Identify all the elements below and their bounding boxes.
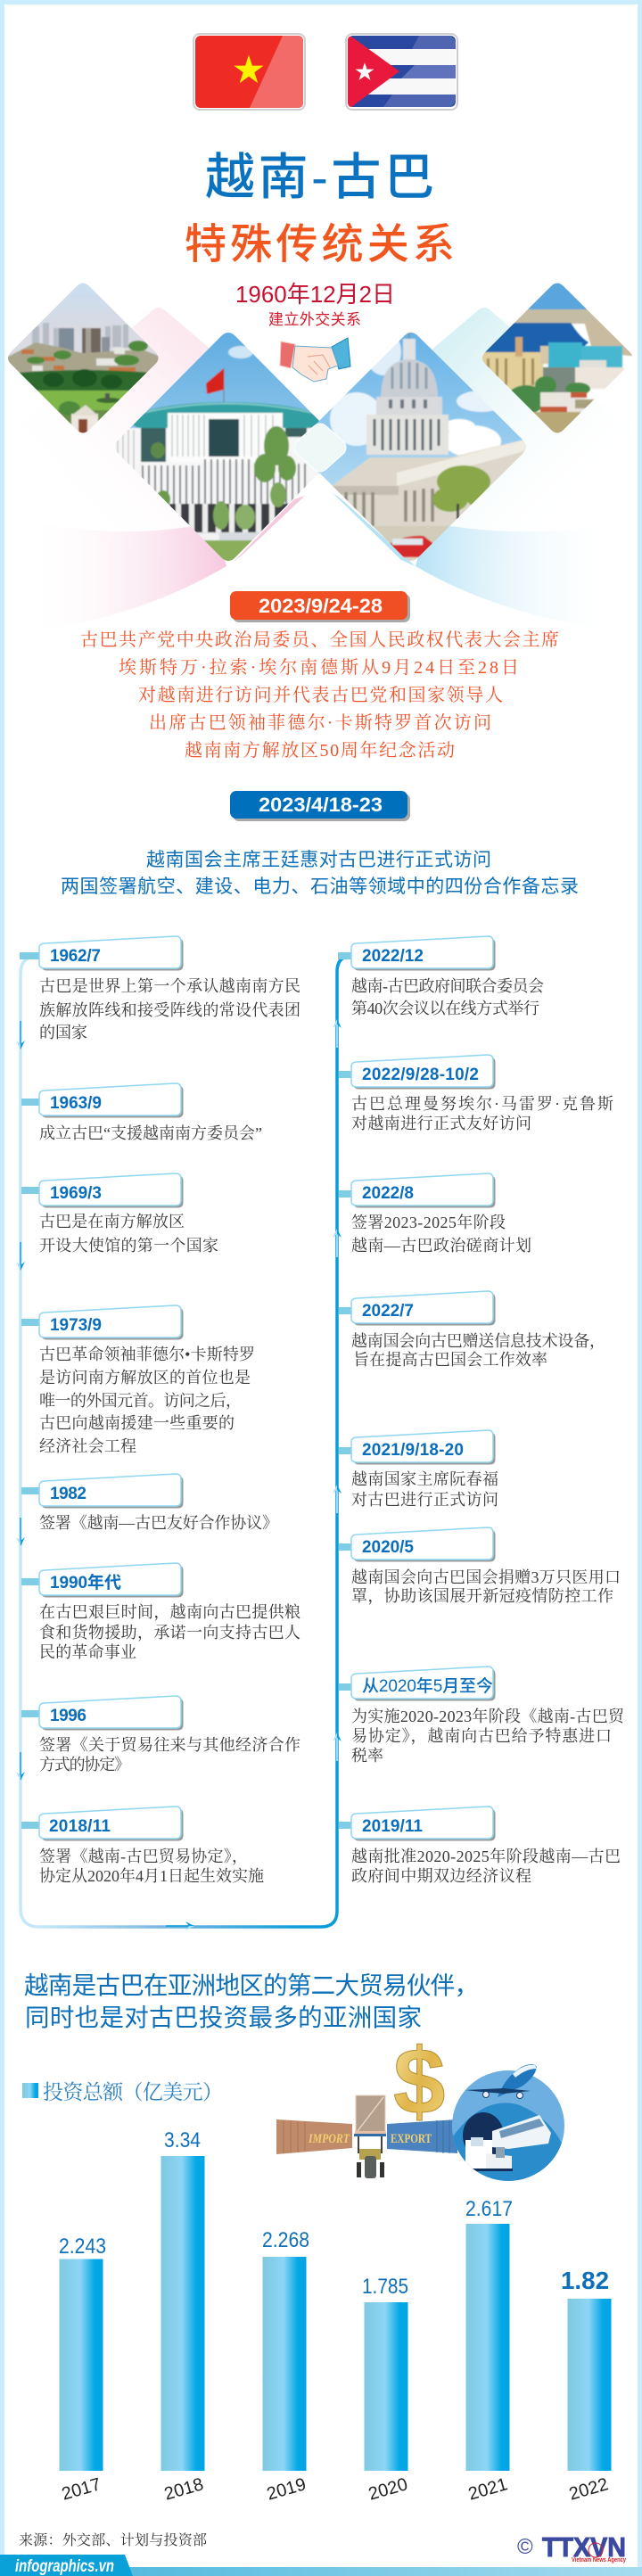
bar 2018: 2018 bbox=[162, 2474, 206, 2505]
text block: September 2023 visit: 埃斯特万·拉索·埃尔南德斯从9月24日至28日 bbox=[119, 657, 519, 678]
bar 2019 bbox=[262, 2228, 309, 2505]
timeline item: 1973/9: 是访问南方解放区的首位也是 bbox=[39, 1368, 251, 1387]
illustration: trade and logistics bbox=[276, 2044, 564, 2181]
timeline item: 2022/7: 越南国会向古巴赠送信息技术设备， bbox=[351, 1331, 605, 1350]
timeline item: 1969/3: 1969/3 bbox=[50, 1184, 102, 1203]
photo: Vietnam National Assembly building bbox=[116, 333, 319, 561]
text block: September 2023 visit: 对越南进行访问并代表古巴党和国家领导人 bbox=[138, 685, 503, 705]
timeline item: 1973/9: 经济社会工程 bbox=[39, 1437, 136, 1455]
bar 2017: 2017 bbox=[60, 2474, 103, 2505]
icon: handshake bbox=[280, 338, 350, 382]
timeline item: 2020/5: 越南国会向古巴国会捐赠3万只医用口 bbox=[351, 1568, 621, 1586]
bar 2019: 2.268 bbox=[262, 2228, 309, 2252]
bar 2020: 1.785 bbox=[362, 2275, 408, 2299]
timeline item: 2018/11: 2018/11 bbox=[49, 1817, 111, 1836]
timeline item: 2022/7: 2022/7 bbox=[362, 1302, 414, 1321]
bar 2022: 2022 bbox=[567, 2474, 611, 2505]
timeline item: 2022/12: 2022/12 bbox=[362, 947, 424, 966]
timeline item: 1963/9: 1963/9 bbox=[50, 1094, 102, 1113]
timeline item: 2022/8: 签署2023-2025年阶段 bbox=[351, 1213, 506, 1231]
bar chart: investment by year bbox=[59, 2128, 612, 2505]
title line 1: 越南-古巴 bbox=[205, 149, 434, 205]
chart legend: 投资总额（亿美元） bbox=[43, 2081, 223, 2103]
timeline item: 1963/9 bbox=[21, 1083, 262, 1142]
title line 2: 特殊传统关系 bbox=[185, 220, 455, 267]
badge: 2023/4/18-23: 2023/4/18-23 bbox=[259, 794, 383, 816]
timeline item: 2021/9/18-20: 越南国家主席阮春福 bbox=[351, 1469, 498, 1488]
timeline item: 1996: 方式的协定》 bbox=[39, 1756, 130, 1774]
timeline item: 2022/7: 旨在提高古巴国会工作效率 bbox=[353, 1351, 547, 1369]
timeline item: 1969/3 bbox=[21, 1173, 218, 1255]
arrows: down along left line bbox=[16, 1021, 25, 1781]
title bbox=[185, 149, 455, 267]
text block: September 2023 visit bbox=[80, 630, 559, 761]
source note: 来源：外交部、计划与投资部 bbox=[19, 2532, 207, 2548]
icon: export container bbox=[387, 2119, 457, 2153]
timeline item: 2022/9/28-10/2: 2022/9/28-10/2 bbox=[362, 1066, 479, 1084]
icon: gold dollar: $ bbox=[393, 2029, 445, 2134]
bar 2020 bbox=[362, 2275, 410, 2505]
bar 2020: 2020 bbox=[366, 2474, 410, 2505]
timeline item: since May 2020: 为实施2020-2023年阶段《越南-古巴贸 bbox=[351, 1707, 625, 1725]
timeline item: 1996: 签署《关于贸易往来与其他经济合作 bbox=[39, 1736, 300, 1754]
bar 2022: 1.82 bbox=[561, 2267, 609, 2294]
footer band bbox=[0, 2555, 642, 2576]
bar 2022 bbox=[561, 2267, 612, 2505]
timeline item: since May 2020: 税率 bbox=[351, 1747, 383, 1765]
background decoration: pink and cyan shapes bbox=[0, 308, 642, 630]
photo: Cuba Capitol building bbox=[316, 333, 526, 561]
timeline connector lines bbox=[21, 956, 352, 1927]
section heading: trade partner bbox=[24, 1971, 479, 2031]
timeline item: 2019/11: 2019/11 bbox=[362, 1817, 423, 1836]
timeline item: 1962/7: 古巴是世界上第一个承认越南南方民 bbox=[39, 976, 300, 995]
timeline item: 2022/12: 越南-古巴政府间联合委员会 bbox=[351, 976, 544, 995]
timeline item: 2022/12 bbox=[338, 936, 544, 1017]
timeline item: 2019/11 bbox=[339, 1806, 621, 1885]
bar 2021 bbox=[465, 2197, 513, 2505]
timeline item: 1962/7: 的国家 bbox=[39, 1024, 87, 1041]
arrow: along bottom line bbox=[166, 1922, 194, 1930]
timeline item: 2018/11: 协定从2020年4月1日起生效实施 bbox=[39, 1866, 264, 1885]
timeline item: 1990s: 在古巴艰巨时间，越南向古巴提供粮 bbox=[39, 1602, 300, 1621]
date of diplomatic relations bbox=[235, 281, 395, 328]
bar 2017: 2.243 bbox=[59, 2234, 106, 2259]
bar 2017 bbox=[59, 2234, 106, 2505]
icon: forklift with crate bbox=[354, 2095, 386, 2178]
badge: 2023/9/24-28 bbox=[230, 591, 410, 622]
timeline item: 2021/9/18-20: 2021/9/18-20 bbox=[362, 1441, 464, 1460]
timeline item: 1973/9: 唯一的外国元首。访问之后， bbox=[39, 1392, 242, 1410]
timeline item: 2022/8: 越南—古巴政治磋商计划 bbox=[351, 1236, 531, 1255]
center pale diamond bbox=[294, 424, 346, 472]
timeline item: 2020/5 bbox=[339, 1527, 621, 1605]
timeline item: 1962/7 bbox=[20, 936, 300, 1041]
timeline item: 1990s: 民的革命事业 bbox=[39, 1643, 136, 1661]
arrows: up along right line bbox=[333, 1019, 342, 1761]
bar 2018 bbox=[160, 2128, 206, 2505]
timeline item: 1982: 签署《越南—古巴友好合作协议》 bbox=[39, 1513, 278, 1532]
photo: Hanoi cityscape bbox=[8, 284, 159, 433]
timeline item: 2020/5: 罩，协助该国展开新冠疫情防控工作 bbox=[351, 1587, 613, 1605]
timeline item: 1990s bbox=[21, 1563, 300, 1661]
photo: Havana cityscape bbox=[482, 284, 633, 433]
logo: TTXVN: TTXVN bbox=[542, 2531, 626, 2563]
icon: Cuba flag bbox=[346, 34, 457, 110]
timeline item: 2022/9/28-10/2: 对越南进行正式友好访问 bbox=[351, 1114, 531, 1132]
timeline item: 1996 bbox=[21, 1696, 300, 1774]
timeline item: 2021/9/18-20 bbox=[339, 1430, 498, 1509]
text block: April 2023 visit: 两国签署航空、建设、电力、石油等领域中的四份合作备忘录 bbox=[61, 876, 579, 897]
timeline item: since May 2020 bbox=[339, 1667, 625, 1765]
timeline item: 2020/5: 2020/5 bbox=[362, 1538, 414, 1557]
footer band: infographics.vn bbox=[15, 2557, 114, 2576]
icon: import container: IMPORT bbox=[308, 2132, 350, 2146]
section heading: trade partner: 同时也是对古巴投资最多的亚洲国家 bbox=[25, 2004, 422, 2031]
timeline item: 1990s: 食和货物援助，承诺一向支持古巴人 bbox=[39, 1624, 300, 1642]
icon: import container bbox=[276, 2119, 352, 2154]
logo: TTXVN: © bbox=[517, 2535, 533, 2559]
text block: April 2023 visit: 越南国会主席王廷惠对古巴进行正式访问 bbox=[146, 850, 491, 870]
bar 2019: 2019 bbox=[265, 2474, 309, 2505]
timeline item: 2019/11: 政府间中期双边经济议程 bbox=[351, 1867, 531, 1885]
badge: 2023/9/24-28: 2023/9/24-28 bbox=[259, 595, 383, 617]
timeline item: 2022/8: 2022/8 bbox=[362, 1184, 414, 1203]
icon: airplane bbox=[465, 2064, 537, 2099]
timeline item: 1982 bbox=[21, 1474, 278, 1532]
timeline item: 1982: 1982 bbox=[50, 1485, 86, 1503]
timeline item: 1969/3: 开设大使馆的第一个国家 bbox=[39, 1237, 218, 1255]
icon: transport circle bbox=[450, 2070, 566, 2185]
timeline item: 1996: 1996 bbox=[50, 1707, 86, 1725]
text block: April 2023 visit bbox=[61, 850, 579, 897]
bar 2021: 2021 bbox=[466, 2474, 510, 2505]
timeline item: 1973/9: 古巴革命领袖菲德尔•卡斯特罗 bbox=[39, 1346, 255, 1363]
timeline item: 1962/7: 族解放阵线和接受阵线的常设代表团 bbox=[39, 1001, 300, 1019]
timeline item: 2021/9/18-20: 对古巴进行正式访问 bbox=[351, 1491, 498, 1509]
timeline item: 2022/8 bbox=[339, 1173, 531, 1255]
timeline item: since May 2020: 易协定》，越南向古巴给予特惠进口 bbox=[351, 1726, 612, 1745]
bar 2021: 2.617 bbox=[465, 2197, 513, 2221]
timeline item: 2018/11 bbox=[21, 1806, 264, 1885]
section heading: trade partner: 越南是古巴在亚洲地区的第二大贸易伙伴， bbox=[24, 1971, 479, 1999]
logo: TTXVN: Vietnam News Agency bbox=[572, 2557, 626, 2564]
date of diplomatic relations: 建立外交关系 bbox=[268, 311, 361, 328]
timeline item: 2022/7 bbox=[339, 1291, 605, 1369]
bar 2018: 3.34 bbox=[164, 2128, 201, 2152]
text block: September 2023 visit: 越南南方解放区50周年纪念活动 bbox=[185, 740, 455, 761]
timeline item: since May 2020: 从2020年5月至今 bbox=[362, 1676, 493, 1696]
timeline item: 2018/11: 签署《越南-古巴贸易协定》， bbox=[39, 1847, 248, 1865]
timeline item: 1990s: 1990年代 bbox=[50, 1572, 121, 1593]
timeline item: 1963/9: 成立古巴“支援越南南方委员会” bbox=[39, 1123, 262, 1142]
icon: Vietnam flag bbox=[193, 34, 305, 110]
timeline item: 1973/9 bbox=[21, 1305, 255, 1455]
timeline item: 2019/11: 越南批准2020-2025年阶段越南—古巴 bbox=[351, 1847, 621, 1865]
badge: 2023/4/18-23 bbox=[230, 791, 410, 821]
timeline item: 1962/7: 1962/7 bbox=[50, 947, 101, 966]
text block: September 2023 visit: 古巴共产党中央政治局委员、全国人民政权代表大会主席 bbox=[80, 630, 559, 650]
timeline item: 2022/9/28-10/2 bbox=[339, 1055, 613, 1132]
text block: September 2023 visit: 出席古巴领袖菲德尔·卡斯特罗首次访问 bbox=[149, 712, 491, 733]
date of diplomatic relations: 1960年12月2日 bbox=[235, 281, 395, 308]
timeline item: 2022/12: 第40次会议以在线方式举行 bbox=[351, 1000, 539, 1017]
timeline item: 1969/3: 古巴是在南方解放区 bbox=[39, 1212, 185, 1230]
timeline item: 2022/9/28-10/2: 古巴总理曼努埃尔·马雷罗·克鲁斯 bbox=[351, 1095, 613, 1113]
timeline item: 1973/9: 1973/9 bbox=[50, 1316, 102, 1335]
icon: export container: EXPORT bbox=[391, 2132, 432, 2146]
timeline item: 1973/9: 古巴向越南援建一些重要的 bbox=[39, 1413, 235, 1432]
